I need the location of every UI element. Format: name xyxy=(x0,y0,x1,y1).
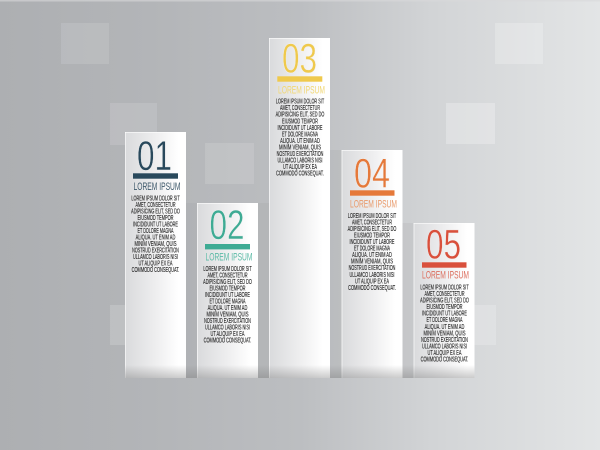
text block 1: EIUSMOD TEMPOR xyxy=(138,215,174,222)
text block 4: ALIQUA. UT ENIM AD xyxy=(352,252,392,259)
text block 4: UT ALIQUIP EX EA xyxy=(355,278,389,285)
number 02: 02 xyxy=(210,201,244,248)
text block 5: AMET, CONSECTETUR xyxy=(424,291,465,298)
text block 2: AMET, CONSECTETUR xyxy=(208,272,248,279)
text block 3 xyxy=(276,99,325,178)
bar 1 xyxy=(133,173,178,179)
text block 4: COMMODO CONSEQUAT. xyxy=(348,285,396,292)
text block 1: MINIM VENIAM, QUIS xyxy=(134,241,177,248)
text block 3: ET DOLORE MAGNA xyxy=(282,131,318,138)
text block 2: EIUSMOD TEMPOR xyxy=(210,285,246,292)
panel 4 xyxy=(342,150,402,378)
text block 5: UT ALIQUIP EX EA xyxy=(428,350,462,357)
text block 3: ADIPISICING ELIT, SED DO xyxy=(276,112,325,119)
panel 2 xyxy=(197,201,258,378)
number 04: 04 xyxy=(354,150,390,196)
text block 5: ADIPISICING ELIT, SED DO xyxy=(420,298,469,305)
card 2 xyxy=(197,203,258,378)
text block 5: MINIM VENIAM, QUIS xyxy=(424,330,466,337)
text block 1: ALIQUA. UT ENIM AD xyxy=(136,235,175,242)
text block 4: AMET, CONSECTETUR xyxy=(352,220,392,227)
text block 1: ULLAMCO LABORIS NISI xyxy=(133,254,178,261)
panel 5 xyxy=(414,220,474,378)
decorative background squares xyxy=(61,23,543,345)
heading 2: LOREM IPSUM xyxy=(206,251,252,263)
heading 4: LOREM IPSUM xyxy=(350,198,397,210)
text block 3: ALIQUA. UT ENIM AD xyxy=(280,138,320,145)
text block 4: EIUSMOD TEMPOR xyxy=(354,233,390,240)
text block 5: NOSTRUD EXERCITATION xyxy=(421,337,468,344)
text block 5: ALIQUA. UT ENIM AD xyxy=(425,324,464,331)
text block 1: NOSTRUD EXERCITATION xyxy=(132,248,179,255)
text block 2: ULLAMCO LABORIS NISI xyxy=(205,325,250,332)
text block 5: LOREM IPSUM DOLOR SIT xyxy=(420,285,469,292)
text block 5: COMMODO CONSEQUAT. xyxy=(421,356,468,363)
text block 5: ET DOLORE MAGNA xyxy=(426,317,463,324)
text block 3: AMET, CONSECTETUR xyxy=(280,105,320,112)
text block 3: UT ALIQUIP EX EA xyxy=(283,164,317,171)
text block 2: UT ALIQUIP EX EA xyxy=(210,331,245,338)
text block 4: MINIM VENIAM, QUIS xyxy=(351,259,393,266)
text block 2: COMMODO CONSEQUAT. xyxy=(204,338,251,345)
text block 4: ULLAMCO LABORIS NISI xyxy=(350,272,395,279)
number 03: 03 xyxy=(282,34,317,82)
text block 3: ULLAMCO LABORIS NISI xyxy=(278,157,323,164)
text block 3: NOSTRUD EXERCITATION xyxy=(277,151,323,158)
text block 2: ET DOLORE MAGNA xyxy=(210,298,246,305)
number 05: 05 xyxy=(426,220,461,268)
text block 3: LOREM IPSUM DOLOR SIT xyxy=(276,99,325,106)
number 01: 01 xyxy=(137,132,172,179)
text block 5: INCIDIDUNT UT LABORE xyxy=(422,311,467,318)
text block 2: LOREM IPSUM DOLOR SIT xyxy=(203,266,252,273)
text block 5 xyxy=(420,285,469,363)
text block 1 xyxy=(131,195,180,274)
bar 5 xyxy=(422,262,466,268)
heading 1: LOREM IPSUM xyxy=(134,181,180,193)
text block 1: ADIPISICING ELIT, SED DO xyxy=(131,208,180,215)
heading 3: LOREM IPSUM xyxy=(278,84,325,96)
text block 2: MINIM VENIAM, QUIS xyxy=(206,312,249,319)
bar 4 xyxy=(350,190,394,196)
panel 3 xyxy=(269,34,330,378)
text block 4 xyxy=(348,213,397,292)
text block 4: ADIPISICING ELIT, SED DO xyxy=(348,226,397,233)
text block 2: ALIQUA. UT ENIM AD xyxy=(208,305,247,312)
text block 4: NOSTRUD EXERCITATION xyxy=(349,265,395,272)
text block 4: LOREM IPSUM DOLOR SIT xyxy=(348,213,397,220)
text block 5: ULLAMCO LABORIS NISI xyxy=(422,343,467,350)
text block 3: MINIM VENIAM, QUIS xyxy=(279,144,321,151)
text block 2: NOSTRUD EXERCITATION xyxy=(204,318,251,325)
text block 5: EIUSMOD TEMPOR xyxy=(426,304,463,311)
text block 1: COMMODO CONSEQUAT. xyxy=(132,267,179,274)
text block 1: LOREM IPSUM DOLOR SIT xyxy=(131,195,180,202)
text block 1: ET DOLORE MAGNA xyxy=(138,228,174,235)
card 4 xyxy=(342,150,402,378)
bar 2 xyxy=(205,244,250,249)
card 3 xyxy=(269,38,330,378)
bar 3 xyxy=(277,76,322,82)
gap shadows between cards xyxy=(186,150,474,378)
heading 5: LOREM IPSUM xyxy=(422,269,469,281)
panel 1 xyxy=(125,132,186,378)
text block 2: ADIPISICING ELIT, SED DO xyxy=(203,279,252,286)
text block 2 xyxy=(203,266,252,345)
text block 1: INCIDIDUNT UT LABORE xyxy=(133,222,178,229)
text block 1: UT ALIQUIP EX EA xyxy=(138,261,173,268)
text block 4: ET DOLORE MAGNA xyxy=(354,246,390,253)
text block 2: INCIDIDUNT UT LABORE xyxy=(205,292,250,299)
text block 3: COMMODO CONSEQUAT. xyxy=(276,171,324,178)
text block 3: EIUSMOD TEMPOR xyxy=(282,118,318,125)
text block 4: INCIDIDUNT UT LABORE xyxy=(350,239,395,246)
card 5 xyxy=(414,223,474,378)
text block 1: AMET, CONSECTETUR xyxy=(136,202,176,209)
card 1 xyxy=(125,132,186,378)
text block 3: INCIDIDUNT UT LABORE xyxy=(278,125,323,132)
